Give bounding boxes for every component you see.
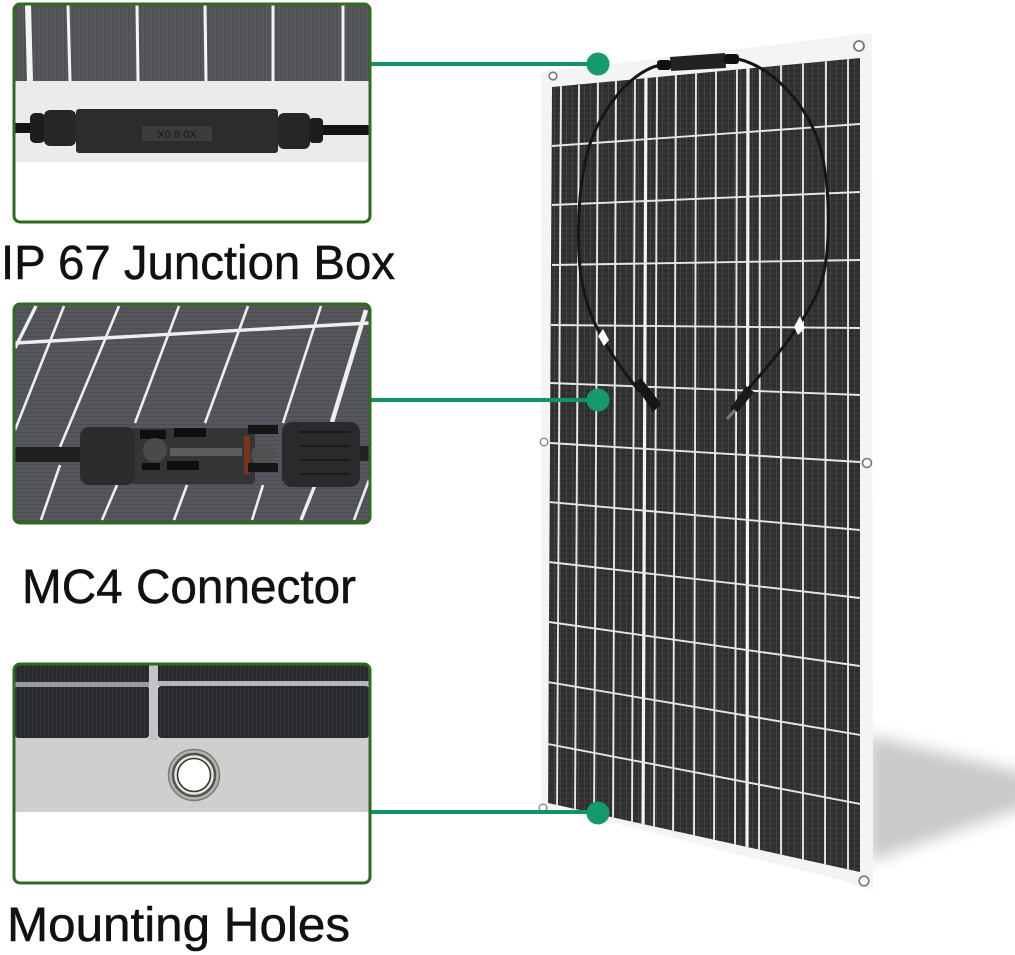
eyelet middle left — [540, 438, 548, 446]
panel cable with junction box and connectors — [579, 53, 828, 419]
panel: junction box photo — [14, 4, 370, 222]
panel: junction box photo: X0 8 0X — [157, 129, 197, 141]
panel white backing — [541, 33, 873, 890]
eyelet bottom right — [859, 876, 869, 886]
eyelet middle right — [862, 458, 872, 468]
photovoltaic cells — [540, 50, 870, 880]
eyelet top right — [854, 41, 864, 51]
connector line: MC4 connector — [371, 388, 610, 412]
label: MC4 Connector: MC4 Connector — [22, 561, 356, 614]
grommet — [168, 750, 220, 800]
label: Mounting Holes: Mounting Holes — [7, 899, 350, 952]
label: IP 67 Junction Box: IP 67 Junction Box — [1, 237, 395, 290]
eyelet bottom left — [539, 804, 547, 812]
panel: MC4 connector photo — [14, 304, 370, 523]
solar panel — [539, 33, 873, 890]
cable — [15, 128, 369, 130]
connector line: junction box — [371, 52, 610, 76]
connector line: mounting holes — [371, 802, 610, 824]
eyelet top left — [549, 72, 557, 80]
panel shadow — [868, 735, 1015, 862]
panel: mounting hole photo — [14, 664, 370, 883]
junction box body — [76, 109, 278, 153]
connector — [15, 447, 83, 462]
